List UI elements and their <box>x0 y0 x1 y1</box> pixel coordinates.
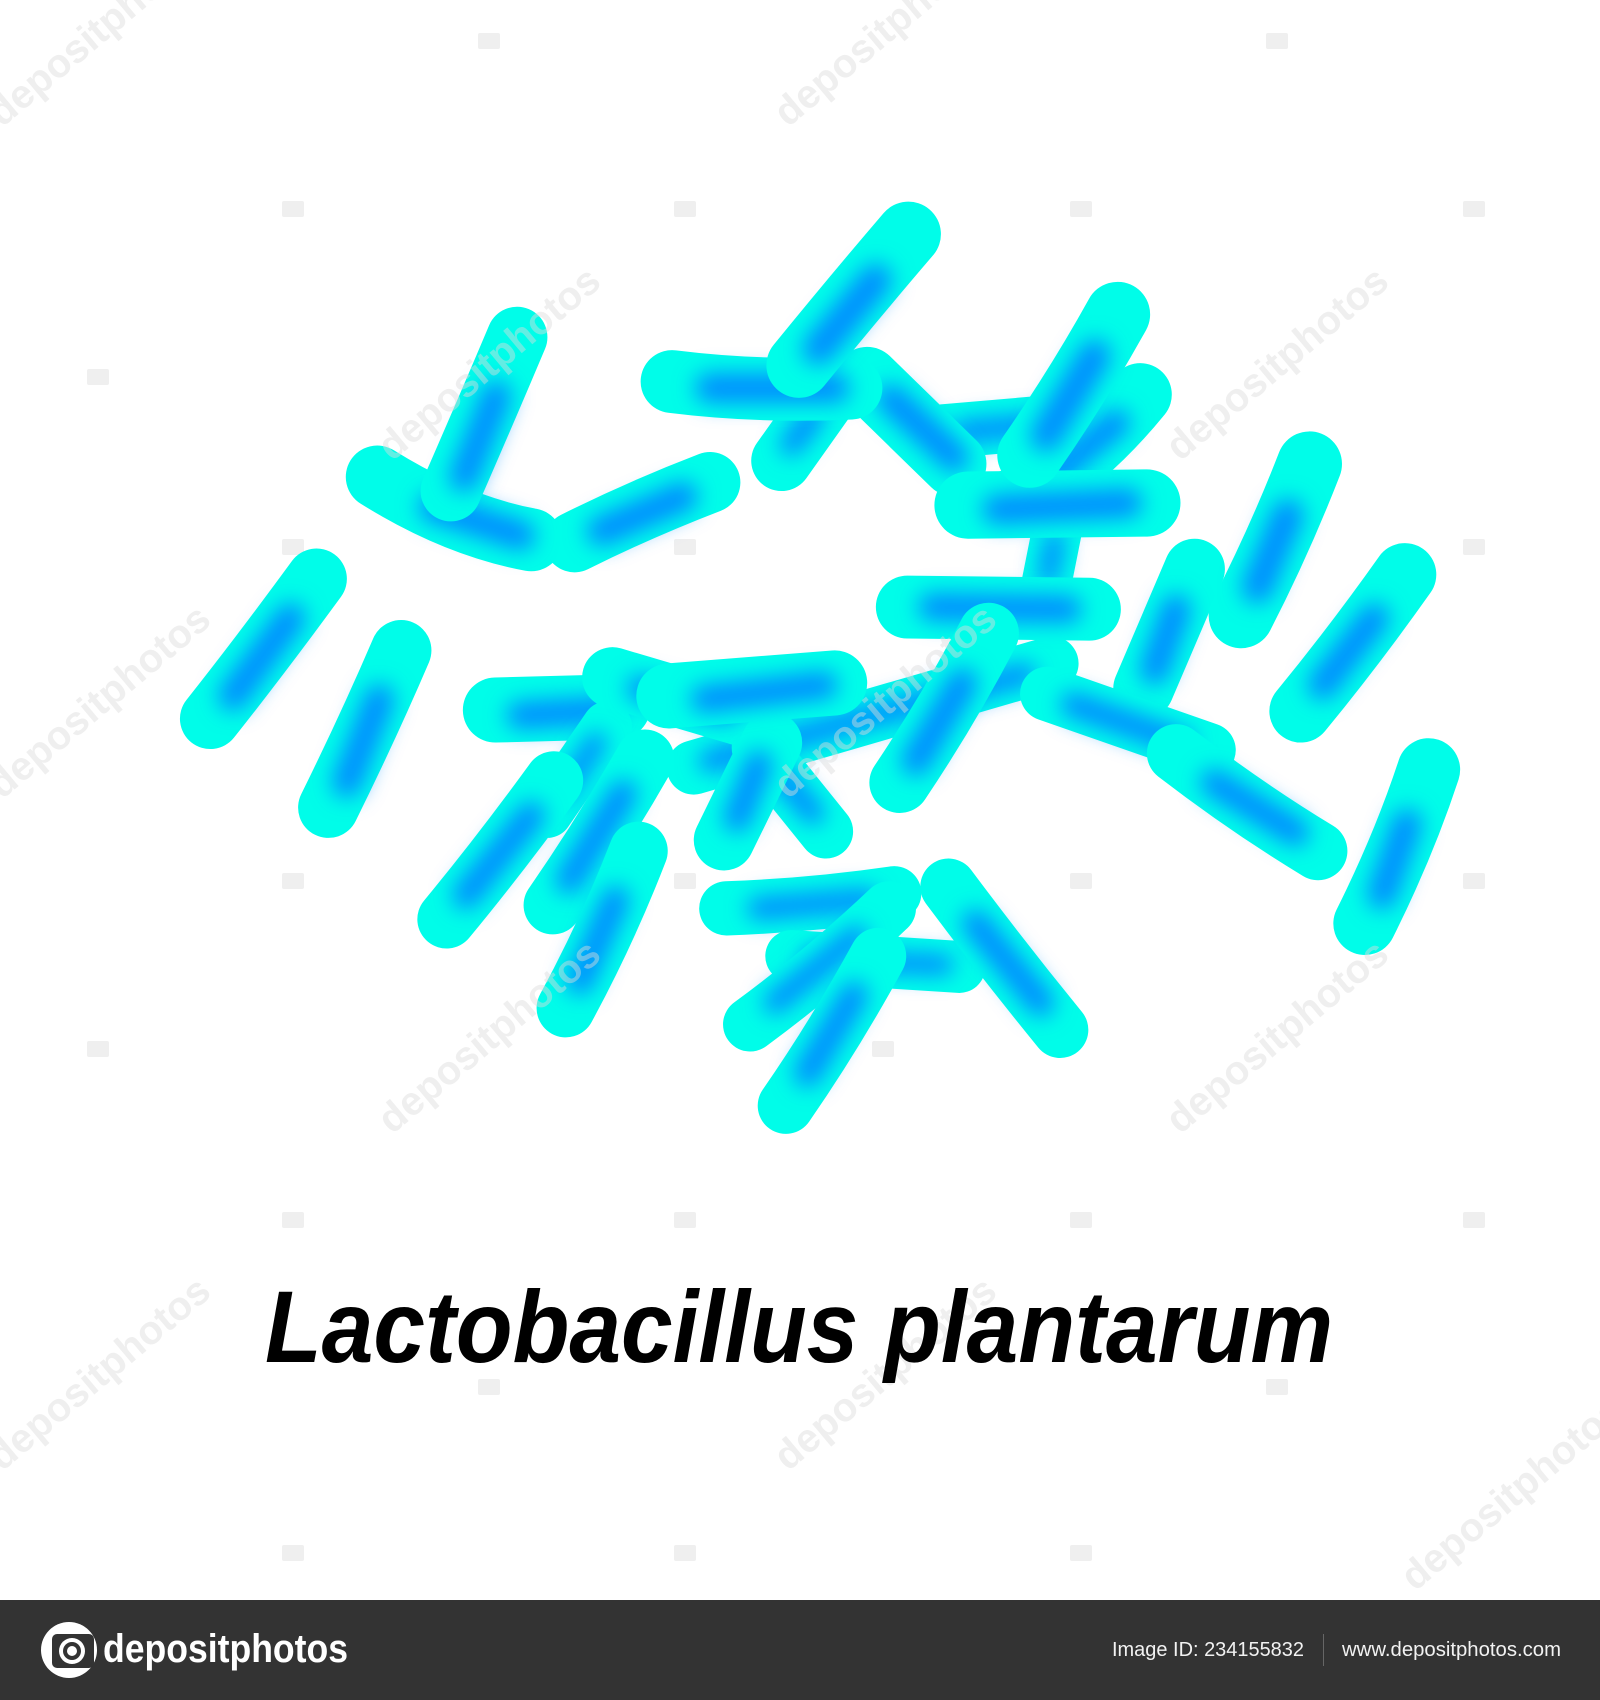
bacterium: bottom right diagonal <box>948 887 1060 1030</box>
bacterium: left bent left arm <box>377 477 531 540</box>
watermark text stamps: depositphotos <box>766 596 1005 807</box>
bacterium: right diagonal behind <box>1003 395 1140 504</box>
bacterium: behind right horizontal <box>943 417 1106 431</box>
bacterium: wide horizontal <box>968 503 1147 509</box>
bacterium: lower left rod three <box>566 851 638 1008</box>
bacterium: centre left horizontal <box>495 707 618 715</box>
bacterium: left bent right arm <box>575 482 710 542</box>
image id: Image ID: 234155832 <box>1112 1639 1304 1661</box>
bacterium: left upright <box>451 337 517 491</box>
bacterium: top horizontal <box>672 382 851 389</box>
bacterium: centre stub behind <box>547 726 607 813</box>
bacterium: centre diagonal <box>612 678 748 718</box>
bacterium: top long <box>799 234 908 365</box>
website url: www.depositphotos.com <box>1341 1639 1561 1661</box>
bacterium: bottom horizontal <box>726 893 894 908</box>
bacterium: centre top horizontal <box>669 683 835 699</box>
logo wordmark: depositphotos <box>103 1627 348 1671</box>
watermark text stamps: depositphotos <box>370 258 609 469</box>
bacterium: far left rod one <box>210 579 317 719</box>
bacterium: bottom diagonal <box>750 908 889 1024</box>
icon: depositphotos camera logo <box>41 1622 97 1678</box>
bacterium: bottom front <box>786 956 878 1106</box>
bacterium: stub below cluster <box>1046 531 1057 585</box>
bacteria cluster illustration <box>210 234 1429 1106</box>
watermark text stamps: depositphotos <box>766 1268 1005 1479</box>
bacterium: lower right horizontal one <box>1047 694 1209 750</box>
bacterium: bottom behind horizontal <box>791 956 959 967</box>
bacterium: centre lower stub <box>759 748 826 831</box>
footer bar <box>0 1600 1600 1700</box>
watermark text stamps: depositphotos <box>370 931 609 1142</box>
bacterium: right rod one <box>1144 569 1195 688</box>
bacterium: centre right horizontal <box>907 607 1089 609</box>
bacterium: lower right horizontal two <box>1176 753 1318 851</box>
bacterium: lower left rod two <box>553 759 645 905</box>
bacterium: centre right diagonal <box>900 633 989 783</box>
watermark text stamps: depositphotos <box>1158 931 1397 1142</box>
watermark text stamps: depositphotos <box>1158 258 1397 469</box>
bacterium: far right rod <box>1365 770 1429 924</box>
bacterium: centre short down <box>724 743 772 840</box>
bacterium: lower left rod one <box>447 780 554 919</box>
bacterium: far left rod two <box>328 650 401 808</box>
bacterium: right rod two <box>1241 464 1309 616</box>
watermark camera stamps <box>87 33 1485 1561</box>
bacterium: long diagonal through centre <box>694 663 1051 767</box>
bacterium: right rod three <box>1301 575 1405 711</box>
bacterium: top stub <box>782 401 824 461</box>
title: Lactobacillus plantarum <box>265 1270 1333 1384</box>
bacterium: top diagonal <box>867 379 954 464</box>
bacterium: top right long <box>1030 314 1118 455</box>
